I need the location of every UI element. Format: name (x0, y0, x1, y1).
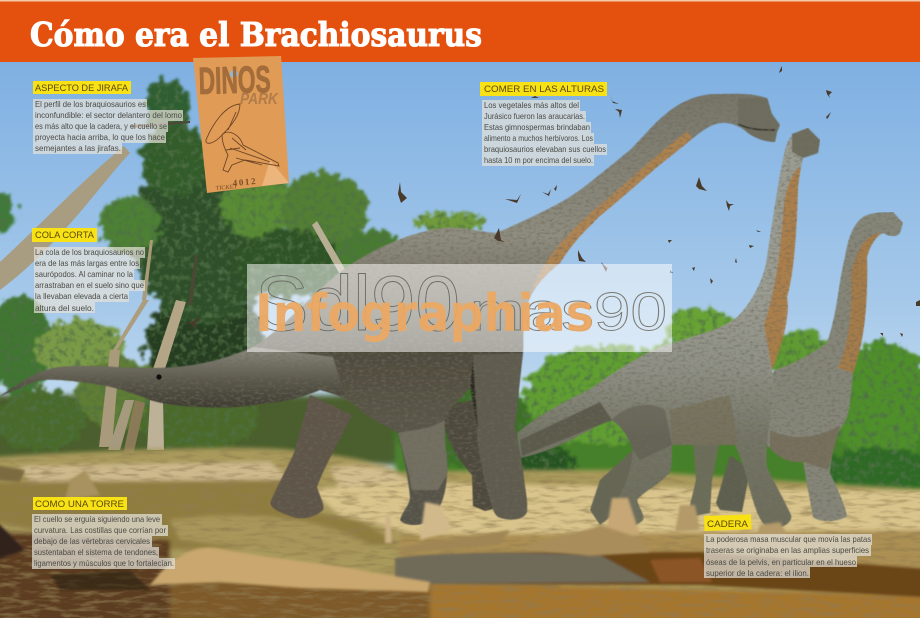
dinosaur: middle brachiosaurus (517, 128, 820, 531)
title: Cómo era el Brachiosaurus (30, 15, 482, 54)
text block: braquiosaurios elevaban sus cuellos (484, 144, 606, 154)
text block: hasta 10 m por encima del suelo. (484, 155, 593, 165)
ticket: Dinos Park (193, 56, 289, 193)
text block: altura del suelo. (35, 303, 94, 313)
text block: era de las más largas entre los (35, 258, 139, 268)
text block: Los vegetales más altos del (484, 100, 579, 110)
text block: saurópodos. Al caminar no la (35, 269, 133, 279)
heading: COMO UNA TORRE (35, 499, 124, 509)
dinosaur: large brachiosaurus (0, 94, 780, 525)
ticket: Dinos Park: TICKET (216, 184, 238, 192)
text block: La cola de los braquiosaurios no (35, 247, 144, 257)
heading: ASPECTO DE JIRAFA (35, 83, 128, 93)
text block: proyecta hacia arriba, lo que los hace (35, 132, 165, 142)
background forest and trees (0, 80, 920, 500)
panel: como una torre (32, 497, 175, 569)
text block: La poderosa masa muscular que movía las patas (706, 534, 871, 544)
text block: Jurásico fueron las araucarias. (484, 111, 585, 121)
dinosaur: large brachiosaurus far legs (270, 395, 497, 518)
text block: curvatura. Las costillas que corrían por (34, 525, 166, 535)
sky background (0, 62, 920, 502)
panel: cadera (704, 514, 872, 578)
header band (0, 0, 920, 62)
text block: alimento a muchos herbívoros. Los (484, 133, 593, 143)
text block (33, 99, 183, 154)
heading (704, 514, 751, 531)
tail marker dot (156, 374, 162, 380)
text block: debajo de las vértebras cervicales (34, 536, 150, 546)
water puddle (395, 552, 920, 598)
heading: COMER EN LAS ALTURAS (484, 84, 604, 94)
ticket: Dinos Park: PARK (240, 91, 279, 108)
panel: cola corta (32, 228, 145, 313)
text block: semejantes a las jirafas. (35, 143, 121, 153)
dinosaur: middle brachiosaurus far legs (590, 440, 750, 525)
tree trunks (0, 121, 349, 500)
icon: dinosaur sketch (206, 104, 279, 172)
text block: arrastraban en el suelo sino que (35, 280, 144, 290)
watermark: Sdl90 (255, 259, 460, 347)
heading: CADERA (707, 519, 748, 529)
text block: inconfundible: el sector delantero del lomo (35, 110, 182, 120)
heading: COLA CORTA (35, 230, 94, 240)
text block: óseas de la pelvis, en particular en el hueso (706, 557, 856, 567)
text block (32, 514, 175, 569)
dinosaur: third brachiosaurus (740, 212, 903, 521)
text block: El cuello se erguía siguiendo una leve (34, 514, 160, 524)
text block: es más alto que la cadera, y el cuello se (35, 121, 167, 131)
fallen log and stumps (0, 465, 790, 592)
text block (482, 100, 607, 166)
text block (704, 534, 872, 578)
panel: comer en las alturas (480, 82, 607, 166)
text block: ligamentos y músculos que lo fortalecían. (34, 558, 174, 568)
text block: la llevaban elevada a cierta (35, 291, 128, 301)
ticket: Dinos Park: DINOS (198, 59, 271, 103)
text block: El perfil de los braquiosaurios es (35, 99, 146, 109)
text block: traseras se originaba en las amplias superficies (706, 545, 869, 555)
text block: Estas gimnospermas brindaban (484, 122, 590, 132)
text block (34, 247, 145, 313)
heading (33, 497, 127, 510)
watermark (247, 259, 672, 352)
text block: superior de la cadera: el ilion. (706, 568, 809, 578)
text block: sustentaban el sistema de tendones, (34, 547, 158, 557)
panel: aspecto de jirafa (33, 81, 183, 154)
watermark: Infographias (255, 284, 594, 344)
ticket: Dinos Park: 4012 (232, 176, 257, 188)
watermark: mas90 (470, 282, 667, 342)
flying pterosaurs (186, 66, 920, 337)
ground (0, 448, 920, 618)
